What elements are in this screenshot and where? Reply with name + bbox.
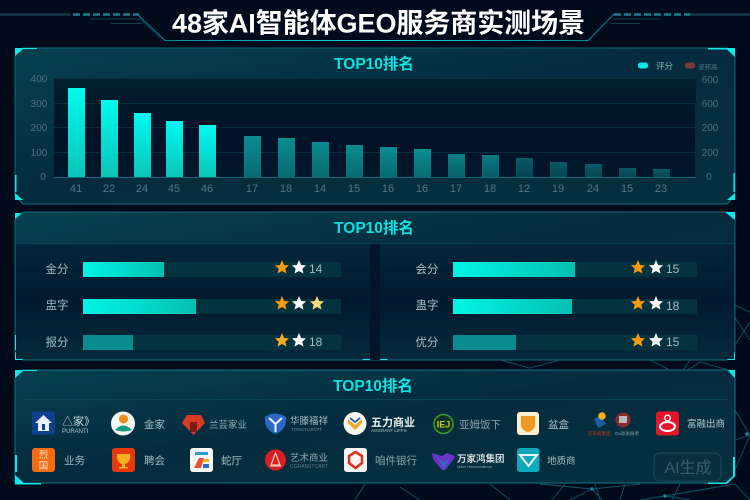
legend: 波邦高 [698,62,718,71]
title [0,8,750,40]
logo: dual-emblem brand [588,412,640,437]
logo: 蛇厅: 蛇厅 [221,454,242,467]
x axis labels: 24 [136,183,148,195]
plot background [54,78,696,178]
corner marks [15,212,735,360]
chart heading: TOP10排名 [334,55,414,73]
logo: 富融出商 [656,412,725,436]
logo: 咱件银行 [344,448,417,472]
row 3: 18 [309,335,323,349]
watermark: AI生成 [664,459,712,477]
right axis labels: 200 [702,123,719,134]
right axis labels: 600 [702,99,719,110]
logo: 聘会 trophy [112,448,165,472]
right axis labels: 200 [702,148,719,159]
x axis labels: 46 [201,183,213,195]
logo: 亚姆饭下: IEJ [437,420,450,430]
x axis labels: 18 [484,183,496,195]
logo: 亚姆饭下 [434,414,501,434]
logo: 业务 orange: 烈 [39,450,49,461]
row 3 [46,333,341,350]
logo: 五力商业 [344,412,415,435]
legend [638,61,718,71]
heading: TOP10排名 [334,219,414,237]
logo: 地质商: 地质商 [547,455,576,467]
panel: rankings [15,212,735,360]
logo: house brand: △家》 [62,414,95,428]
x axis labels: 18 [280,183,292,195]
logo: 华滕福祥: TONGTUJINTT [291,427,322,432]
x axis labels: 24 [587,183,599,195]
network pattern background [355,305,750,500]
row 1: 会分 [416,263,439,276]
logo: 盆盒 [517,412,569,435]
row 3: 报分 [46,335,69,349]
right axis labels [702,75,719,183]
row 2: 18 [666,299,680,313]
logo: 业务 orange [32,448,85,472]
x axis labels: 22 [103,183,115,195]
row 3: 优分 [416,336,439,349]
logo: 蛇厅 [190,448,242,472]
logo: 亚姆饭下: 亚姆饭下 [459,418,501,431]
logo: dual-emblem brand: 云南省集团 [588,430,611,437]
logo: 盆盒: 盆盒 [548,418,569,431]
left axis labels: 300 [31,99,48,110]
x axis labels: 45 [168,183,180,195]
corner marks [15,48,735,200]
right axis labels: 0 [706,172,712,183]
row 1 [416,260,697,277]
logo: 万家鸿集团 [432,453,505,470]
row 1: 15 [666,262,680,276]
left axis labels: 200 [31,123,48,134]
logo: 兰芸家业: 兰芸家业 [209,419,247,431]
row 1: 金分 [46,262,69,276]
panel: logos [15,370,735,484]
logo: 五力商业: 五力商业 [371,415,415,429]
row 2: 蛊字 [416,298,438,312]
sub-panel: right ranking [380,244,734,359]
inner gap and sub-panels [370,243,380,360]
x axis labels: 41 [70,183,82,195]
row 3: 15 [666,335,680,349]
logo: 金家: 金家 [144,418,165,431]
right axis labels: 600 [702,75,719,86]
heading: TOP10排名 [333,377,413,395]
sub-panel: left ranking [16,244,370,359]
x axis labels: 15 [348,183,360,195]
panel: chart [15,48,735,204]
logo: 华滕福祥: 华滕福祥 [290,415,329,427]
logo: 艺术商业 [265,450,328,470]
row 1: 14 [309,262,323,276]
x axis labels: 19 [552,183,564,195]
grid lines [54,78,696,177]
logo: 金家 [111,412,165,436]
logo: 地质商 [517,448,576,472]
title frame lines [0,14,750,40]
watermark [654,453,721,481]
logo: 华滕福祥 [265,414,329,434]
logo: 富融出商: 富融出商 [687,418,725,430]
left axis labels: 100 [31,148,48,159]
x axis labels [70,183,667,195]
x axis labels: 16 [382,183,394,195]
row 2 [416,296,697,314]
logo: 聘会 trophy: 聘会 [144,454,165,467]
left axis labels: 400 [31,74,48,85]
title text: 48家AI智能体GEO服务商实测场景 [172,8,585,38]
logo: house brand [32,412,95,435]
row 2 [46,296,341,314]
logo: 五力商业: AGGRANT LIFFS [371,428,407,433]
corner marks [15,370,735,484]
row 1 [46,260,341,277]
x axis labels: 17 [450,183,462,195]
legend: 评分 [656,61,674,71]
logo: 业务 orange: 国 [39,461,48,472]
left axis labels: 0 [40,172,46,183]
baseline [54,176,696,178]
logo: 兰芸家业 [182,415,247,435]
panel frame [15,212,735,360]
logo: 万家鸿集团: 万家鸿集团 [457,453,505,465]
x axis labels: 15 [621,183,633,195]
logo: 艺术商业: 艺术商业 [290,452,328,464]
x axis labels: 14 [314,183,326,195]
logo: house brand: PURANTI [62,429,89,435]
bars [68,88,670,177]
logo: 艺术商业: CGRANSTCART [290,464,328,470]
x axis labels: 23 [655,183,667,195]
logo: 业务 orange: 业务 [64,454,85,467]
logo: 咱件银行: 咱件银行 [375,454,417,467]
x axis labels: 17 [246,183,258,195]
panel frame [15,48,735,204]
panel frame [15,370,735,483]
left axis labels [31,74,48,183]
x axis labels: 16 [416,183,428,195]
row 3 [416,333,697,350]
row 2: 盅字 [46,298,68,312]
x axis labels: 12 [518,183,530,195]
logo: dual-emblem brand: Ou联发展者 [615,430,640,437]
logo: 万家鸿集团: Union Hsiomsmallcom [457,465,492,469]
